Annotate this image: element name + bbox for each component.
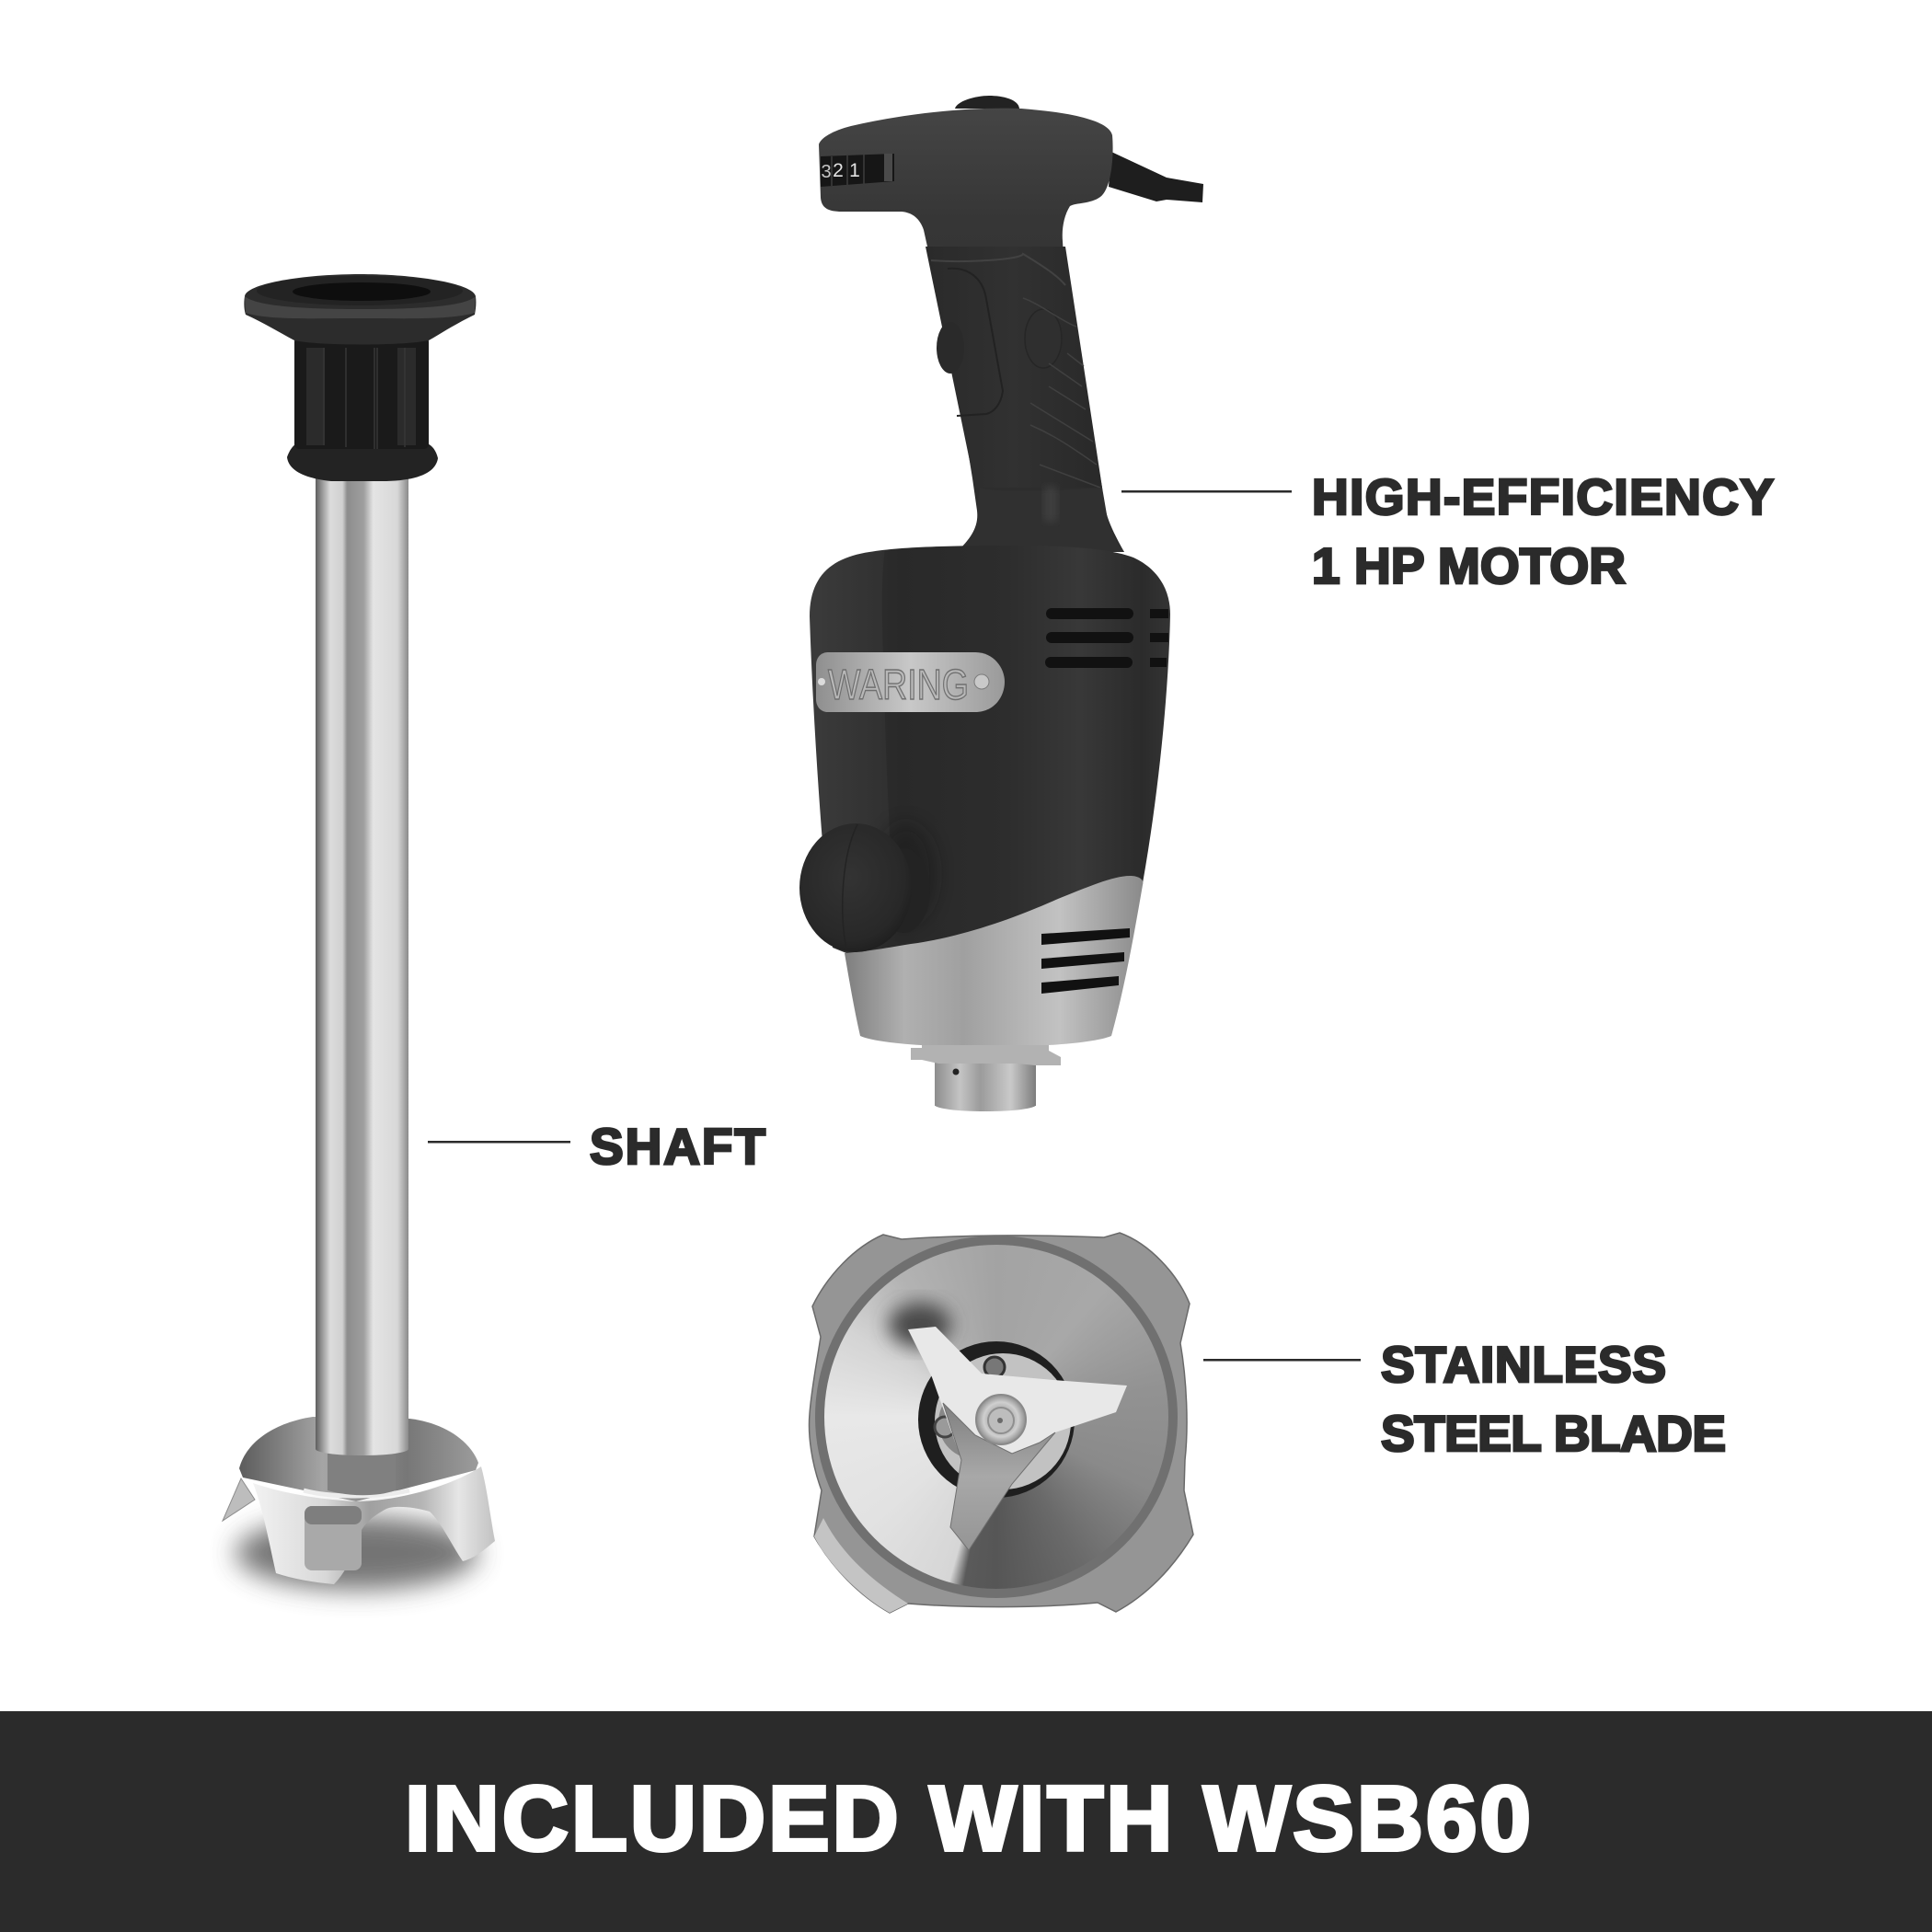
callout: high-efficiency motor: 1 HP MOTOR <box>1312 537 1626 594</box>
vent slots upper <box>1045 608 1168 668</box>
top button <box>955 96 1019 109</box>
speed dial: 3 <box>821 162 832 182</box>
callout: stainless steel blade <box>1203 1336 1726 1462</box>
power cord <box>1109 152 1203 202</box>
collar and spindle <box>911 1045 1061 1111</box>
callout: high-efficiency motor: HIGH-EFFICIENCY <box>1312 468 1774 525</box>
hub recess <box>889 1303 1075 1498</box>
vent slots lower <box>1041 928 1130 994</box>
bell outline <box>810 1233 1193 1613</box>
silver lower housing <box>845 876 1143 1047</box>
handheld motor unit product image <box>799 96 1203 1111</box>
banner title: INCLUDED WITH WSB60 <box>405 1767 1531 1870</box>
speed dial: 2 <box>833 160 844 181</box>
three-point blade <box>908 1327 1127 1550</box>
speed dial: 1 <box>849 160 860 181</box>
callout: shaft: SHAFT <box>590 1118 765 1175</box>
callout: high-efficiency motor <box>1121 468 1774 594</box>
brand plate: WARING <box>828 661 969 708</box>
blade assembly product image <box>810 1233 1193 1613</box>
footer banner <box>0 1711 1932 1932</box>
blade guard knob <box>799 823 936 952</box>
callout: stainless steel blade: STEEL BLADE <box>1381 1405 1726 1462</box>
head and grip <box>819 109 1124 552</box>
bowl dish <box>815 1236 1178 1598</box>
callout: stainless steel blade: STAINLESS <box>1381 1336 1666 1393</box>
shaft product image <box>223 274 495 1590</box>
motor housing <box>810 546 1170 957</box>
speed dial <box>821 154 894 187</box>
